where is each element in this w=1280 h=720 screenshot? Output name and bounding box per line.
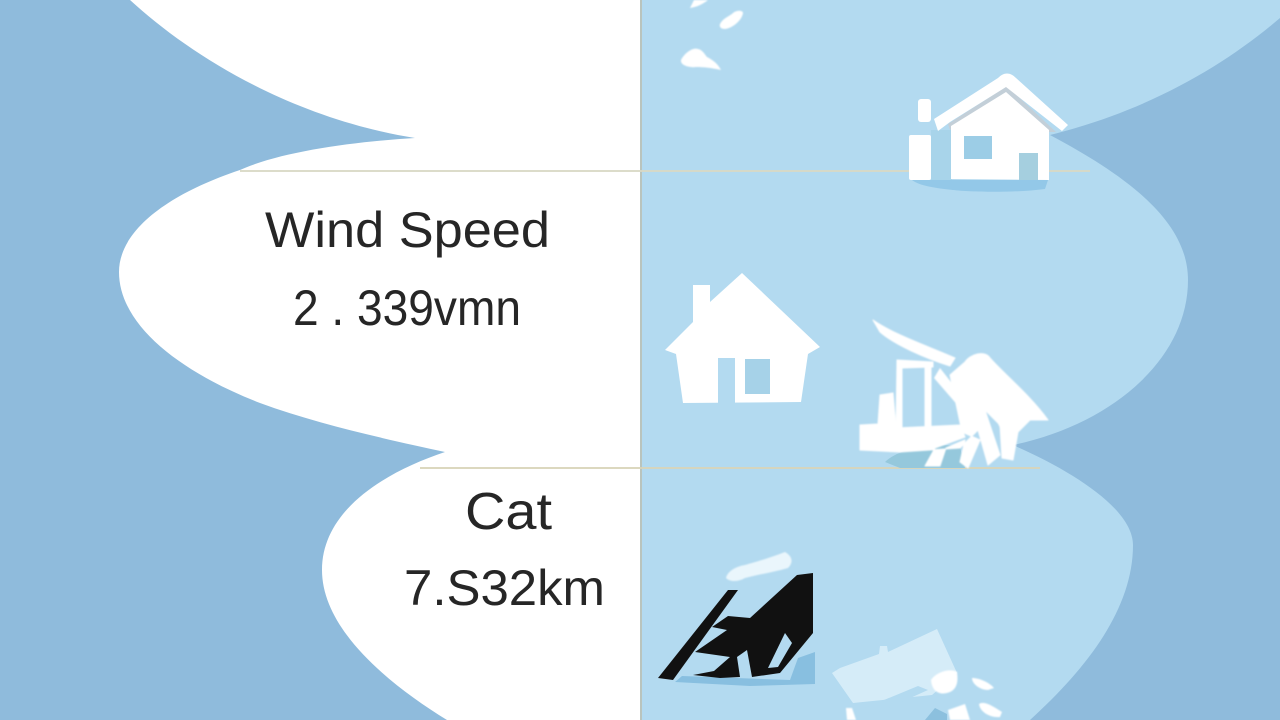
center divider line: [640, 0, 642, 720]
icon: debris chunks bottom: [846, 670, 1002, 720]
icon: flying debris top: [681, 0, 743, 70]
house body: [951, 92, 1049, 180]
house door: [718, 358, 735, 404]
value: wind speed reading: 2 . 339vmn: [293, 280, 521, 336]
roof shadow: [948, 86, 1056, 132]
horizontal rule: lower band: [420, 467, 1040, 469]
icon: house middle: [665, 273, 820, 404]
house side wall shade: [931, 130, 952, 180]
debris accent: [925, 708, 947, 720]
top beam: [873, 320, 955, 366]
debris shadow: [885, 445, 965, 468]
panel: left white funnel: [119, 0, 640, 720]
icon: intact house top: [909, 74, 1068, 192]
icon: collapsed house middle: [860, 320, 1048, 468]
panel: right light blue funnel: [640, 0, 1280, 720]
detached chimney pieces: [918, 99, 931, 122]
heading: Cat: Cat: [465, 483, 553, 541]
horizontal rule: upper band: [240, 170, 1090, 172]
value: category reading: 7.S32km: [404, 560, 605, 616]
house ground shadow: [912, 180, 1048, 192]
roof: [934, 74, 1068, 131]
heading: Wind Speed: Wind Speed: [265, 202, 550, 258]
icon: tilted debris panel: [832, 629, 957, 716]
dust cloud above wreck: [726, 552, 792, 581]
wreck shadow: [675, 652, 815, 686]
house window: [745, 359, 770, 394]
door: [1019, 153, 1038, 180]
icon: black wrecked structure: [658, 552, 815, 686]
window: [964, 136, 992, 159]
opening in wreck: [768, 633, 792, 668]
